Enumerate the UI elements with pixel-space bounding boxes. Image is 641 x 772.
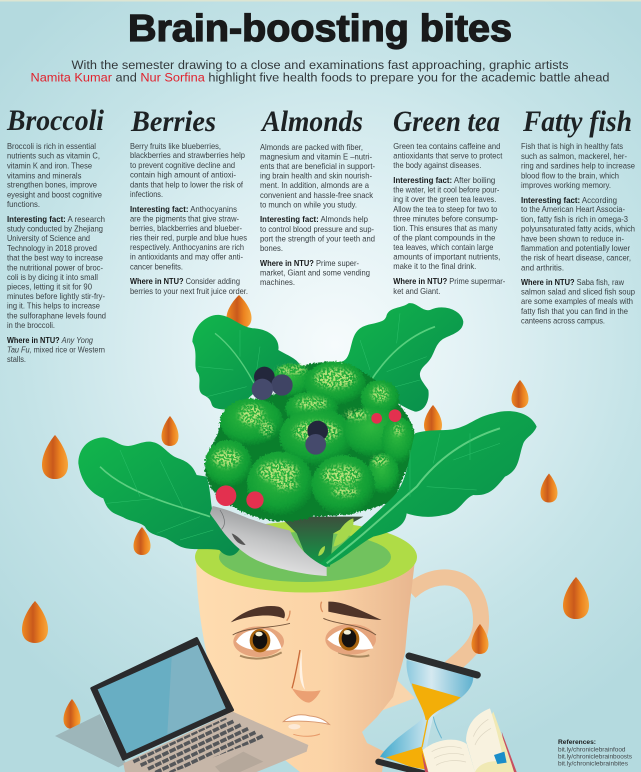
- small leaf fragments: [318, 518, 354, 556]
- right eye: [323, 618, 376, 657]
- text block: broccoli: the sulforaphane levels found: [7, 310, 106, 320]
- text block: broccoli: the nutritional power of broc-: [7, 262, 103, 272]
- right eyebrow: [328, 602, 382, 620]
- text block: berries: respectively. Anthocyanins are rich: [130, 242, 244, 252]
- references: bit.ly/chroniclebrainboosts: [558, 754, 632, 760]
- text block: green tea: ing it over the green tea leaves.: [393, 194, 496, 204]
- panel: fatty fish: [521, 105, 635, 325]
- text block: green tea: the body against diseases.: [393, 160, 481, 170]
- text block: almonds: market, Giant and some vending: [260, 267, 370, 277]
- text block: broccoli: Interesting fact: A research: [7, 214, 105, 224]
- laptop: [55, 638, 308, 772]
- text block: broccoli: that the best way to increase: [7, 253, 103, 263]
- mouth: [283, 715, 329, 736]
- panel: berries: [130, 105, 248, 296]
- subtitle: [30, 58, 610, 84]
- text block: fatty fish: fatty fish that you can find in the: [521, 306, 628, 316]
- text block: berries: Interesting fact: Anthocyanins: [130, 204, 237, 214]
- text block: broccoli: pieces, letting it sit for 90: [7, 282, 92, 292]
- text block: berries: cancer benefits.: [130, 261, 183, 271]
- text block: broccoli: Technology in 2018 proved: [7, 243, 97, 253]
- text block: broccoli: Tau Fu, mixed rice or Western: [7, 344, 105, 354]
- blueberries: [252, 367, 328, 455]
- text block: broccoli: strengthen bones, improve: [7, 180, 97, 190]
- text block: almonds: Interesting fact: Almonds help: [260, 214, 368, 224]
- text block: fatty fish: and arthritis.: [521, 262, 564, 272]
- text block: fatty fish: Where in NTU? Saba fish, raw: [521, 277, 625, 287]
- text block: green tea: Where in NTU? Prime supermar-: [393, 276, 505, 286]
- text block: broccoli: study conducted by Zhejiang: [7, 224, 103, 234]
- text block: broccoli: vitamins and minerals: [7, 170, 82, 180]
- text block: broccoli: Broccoli is rich in essential: [7, 141, 96, 151]
- text block: almonds: ment. In addition, almonds are a: [260, 180, 369, 190]
- heading: almonds: Almonds: [260, 105, 363, 138]
- broccoli florets: [205, 362, 415, 521]
- references: bit.ly/chroniclebrainfood: [558, 746, 626, 754]
- text block: green tea: [393, 141, 505, 296]
- leaf: bottom right: [317, 411, 537, 568]
- text block: berries: dants that help to lower the risk of: [130, 179, 244, 189]
- text block: almonds: port the strength of your teeth and: [260, 233, 375, 243]
- panel: broccoli: [6, 104, 106, 364]
- text block: green tea: tion. This ensures that as many: [393, 223, 498, 233]
- text block: almonds: Where in NTU? Prime super-: [260, 258, 359, 268]
- text block: fatty fish: to the American Heart Associa-: [521, 204, 625, 214]
- text block: almonds: Almonds are packed with fiber,: [260, 142, 363, 152]
- references: [558, 739, 632, 768]
- text block: broccoli: ing it. This helps to increase: [7, 301, 100, 311]
- text block: broccoli: functions.: [7, 199, 40, 209]
- text block: green tea: antioxidants that serve to protect: [393, 150, 503, 160]
- broccoli illustration: leaves, florets, berries, fish: [78, 303, 537, 576]
- text block: broccoli: stalls.: [7, 354, 26, 364]
- text block: fatty fish: tion, fatty fish is rich in omega-3: [521, 214, 628, 224]
- text block: berries: to prevent cognitive decline and: [130, 160, 235, 170]
- text block: fatty fish: [521, 141, 635, 325]
- text block: almonds: to control blood pressure and sup-: [260, 224, 374, 234]
- text block: almonds: magnesium and vitamin E –nutri-: [260, 151, 372, 161]
- text block: almonds: to munch on while you study.: [260, 199, 357, 209]
- references: bit.ly/chroniclebrainbites: [558, 760, 628, 768]
- text block: broccoli: [7, 141, 106, 364]
- text block: broccoli: minutes before lightly stir-fry-: [7, 291, 105, 301]
- text block: green tea: three minutes before consump-: [393, 213, 498, 223]
- text block: broccoli: in the broccoli.: [7, 320, 55, 330]
- text block: broccoli: coli is by dicing it into small: [7, 272, 98, 282]
- heading: fatty fish: Fatty fish: [522, 105, 632, 138]
- text block: almonds: ing brain health and skin nourish-: [260, 171, 372, 181]
- text block: almonds: convenient and hassle-free snack: [260, 190, 374, 200]
- text block: berries: in antioxidants and may offer anti-: [130, 252, 243, 262]
- brow ticks: [287, 602, 323, 621]
- references: References:: [558, 739, 596, 746]
- broccoli stalk: [280, 517, 363, 567]
- subtitle: Namita Kumar and Nur Sorfina highlight five health foods to prepare you for the academic battle ahead: [30, 70, 610, 84]
- raspberries: [216, 409, 401, 509]
- text block: fatty fish: flammation and potentially lower: [521, 243, 630, 253]
- text block: berries: are the pigments that give straw-: [130, 213, 239, 223]
- text block: almonds: [260, 142, 375, 287]
- text block: berries: berries, blackberries and blueber-: [130, 223, 242, 233]
- leaf: top left: [192, 315, 300, 409]
- text block: berries: infections.: [130, 189, 163, 199]
- panel: almonds: [260, 105, 375, 287]
- leaf: bottom left: [78, 437, 240, 556]
- text block: fatty fish: Fish that is high in healthy fats: [521, 141, 623, 151]
- icons: almonds behind the illustration: [22, 295, 589, 729]
- left eyebrow: [231, 606, 285, 622]
- text block: green tea: make it to the final drink.: [393, 261, 476, 271]
- text block: green tea: tea leaves, which contain large: [393, 242, 493, 252]
- mug face head: [196, 560, 415, 772]
- text block: berries: ries their red, purple and blue hues: [130, 232, 247, 242]
- text block: berries: contain high amount of antioxi-: [130, 170, 236, 180]
- text block: green tea: amounts of important nutrients,: [393, 252, 500, 262]
- text block: green tea: Allow the tea to steep for two to: [393, 204, 497, 214]
- text block: green tea: of the plant compounds in the: [393, 232, 495, 242]
- text block: green tea: ket and Giant.: [393, 286, 440, 296]
- text block: broccoli: vitamin K and iron. These: [7, 161, 92, 171]
- text block: berries: blackberries and strawberries help: [130, 150, 245, 160]
- text block: berries: berries to your next fruit juice order.: [130, 286, 248, 296]
- text block: berries: [130, 141, 248, 296]
- text block: fatty fish: Interesting fact: According: [521, 195, 617, 205]
- fish: [210, 506, 327, 576]
- text block: green tea: Interesting fact: After boiling: [393, 175, 495, 185]
- text block: broccoli: nutrients such as vitamin C,: [7, 150, 100, 160]
- text block: fatty fish: blood flow to the brain, which: [521, 170, 619, 180]
- text block: berries: Berry fruits like blueberries,: [130, 141, 221, 151]
- text block: fatty fish: canteens across campus.: [521, 315, 605, 325]
- mug rim: [195, 522, 417, 592]
- heading: broccoli: Broccoli: [6, 104, 105, 137]
- text block: broccoli: Where in NTU? Any Yong: [7, 335, 93, 345]
- heading: green tea: Green tea: [393, 105, 500, 138]
- text block: almonds: ents that are beneficial in support-: [260, 161, 375, 171]
- left eye: [233, 623, 290, 659]
- text block: broccoli: University of Science and: [7, 233, 90, 243]
- icon: almond on mug handle: [472, 624, 488, 654]
- hourglass: [378, 656, 477, 772]
- text block: fatty fish: have been shown to reduce in-: [521, 233, 624, 243]
- panel: green tea: [393, 105, 505, 296]
- mug handle: [378, 577, 481, 712]
- text block: green tea: Green tea contains caffeine and: [393, 141, 500, 151]
- text block: broccoli: eyesight and boost cognitive: [7, 190, 102, 200]
- text block: berries: Where in NTU? Consider adding: [130, 276, 240, 286]
- text block: green tea: the water, let it cool before pour-: [393, 184, 499, 194]
- text block: almonds: bones.: [260, 243, 283, 253]
- leaf: top right: [342, 303, 463, 412]
- face: eyes, brows, nose, mouth: [231, 602, 382, 736]
- text block: fatty fish: improves working memory.: [521, 180, 611, 190]
- text block: almonds: machines.: [260, 277, 295, 287]
- subtitle: With the semester drawing to a close and examinations fast approaching, graphic artists: [72, 58, 568, 72]
- text block: fatty fish: such as salmon, mackerel, her-: [521, 151, 627, 161]
- title: Brain-boosting bites: [128, 8, 512, 50]
- open book: [422, 708, 517, 772]
- nose: [292, 649, 321, 703]
- heading: berries: Berries: [130, 105, 216, 138]
